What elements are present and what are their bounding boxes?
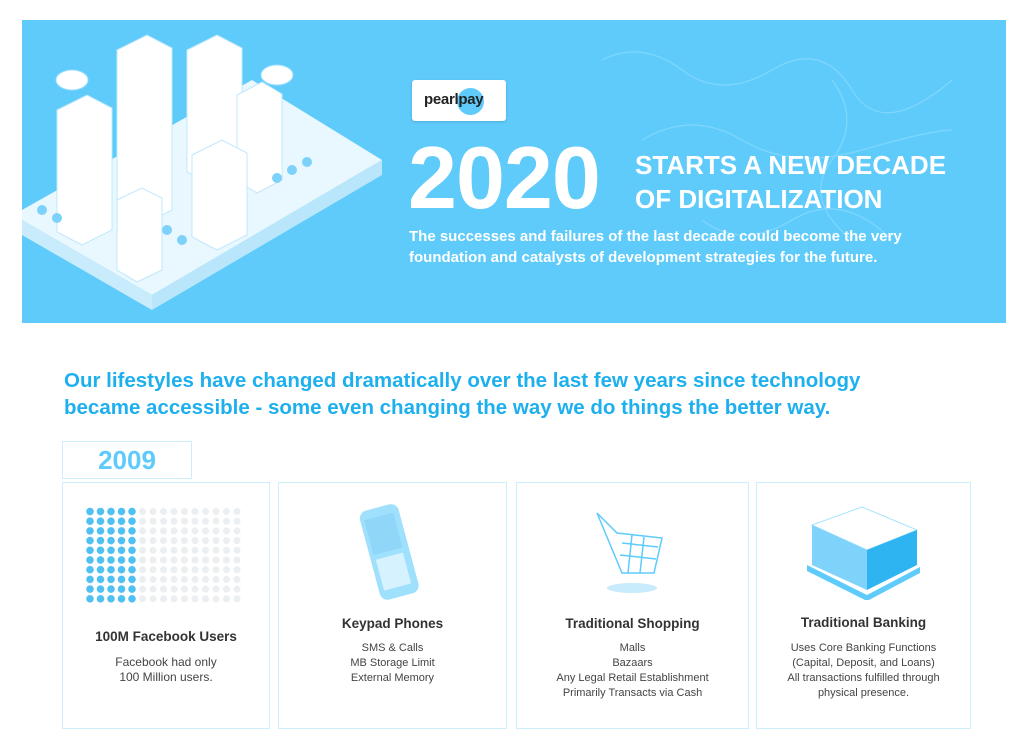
banner (22, 20, 1006, 323)
heading: starts a new decade (635, 150, 946, 214)
year label 2009 (62, 441, 192, 479)
card: facebook users: 100 Million users. (119, 670, 213, 684)
card: keypad phones: External Memory (351, 672, 434, 684)
card: traditional banking: Uses Core Banking Functions (791, 642, 936, 654)
icon: bank (807, 506, 920, 600)
card: keypad phones: Keypad Phones (342, 616, 443, 631)
card: facebook users: Facebook had only (115, 655, 217, 669)
card: keypad phones: SMS & Calls (362, 642, 423, 654)
card: traditional shopping: Any Legal Retail Establishment (556, 672, 709, 684)
subtitle text: The successes and failures of the last decade could become the very foundation and catalysts of development strategies for the future. (409, 228, 902, 266)
heading: 2020: 2020 (408, 128, 600, 227)
background world map pattern (602, 52, 952, 240)
icon: cart (596, 512, 663, 593)
heading: starts a new decade: STARTS A NEW DECADE (635, 150, 946, 180)
year label 2009: 2009 (98, 445, 156, 475)
card: keypad phones (278, 482, 507, 729)
intro headline: became accessible - some even changing the way we do things the better way. (64, 396, 830, 419)
card: traditional banking: (Capital, Deposit, and Loans) (792, 657, 935, 669)
dot chart (86, 508, 240, 603)
logo: pearlpay: pearlpay (424, 91, 483, 108)
card: traditional shopping: Primarily Transacts via Cash (563, 687, 702, 699)
card: traditional shopping: Bazaars (612, 657, 653, 669)
card: traditional banking: All transactions fulfilled through (787, 672, 940, 684)
card: traditional banking: physical presence. (818, 687, 909, 699)
heading: starts a new decade: OF DIGITALIZATION (635, 184, 882, 214)
icon: phone (360, 504, 419, 600)
card: keypad phones: MB Storage Limit (350, 657, 435, 669)
card: traditional banking (756, 482, 971, 729)
card: facebook users: 100M Facebook Users (95, 629, 237, 644)
intro headline (64, 369, 860, 419)
card: facebook users (62, 482, 270, 729)
card: traditional shopping: Malls (620, 642, 645, 654)
card: traditional shopping: Traditional Shopping (565, 616, 700, 631)
logo: pearlpay (412, 80, 506, 121)
intro headline: Our lifestyles have changed dramatically over the last few years since technology (64, 369, 860, 392)
illustration: isometric city (22, 34, 382, 310)
card: traditional banking: Traditional Banking (801, 615, 926, 630)
card: traditional shopping (516, 482, 749, 729)
